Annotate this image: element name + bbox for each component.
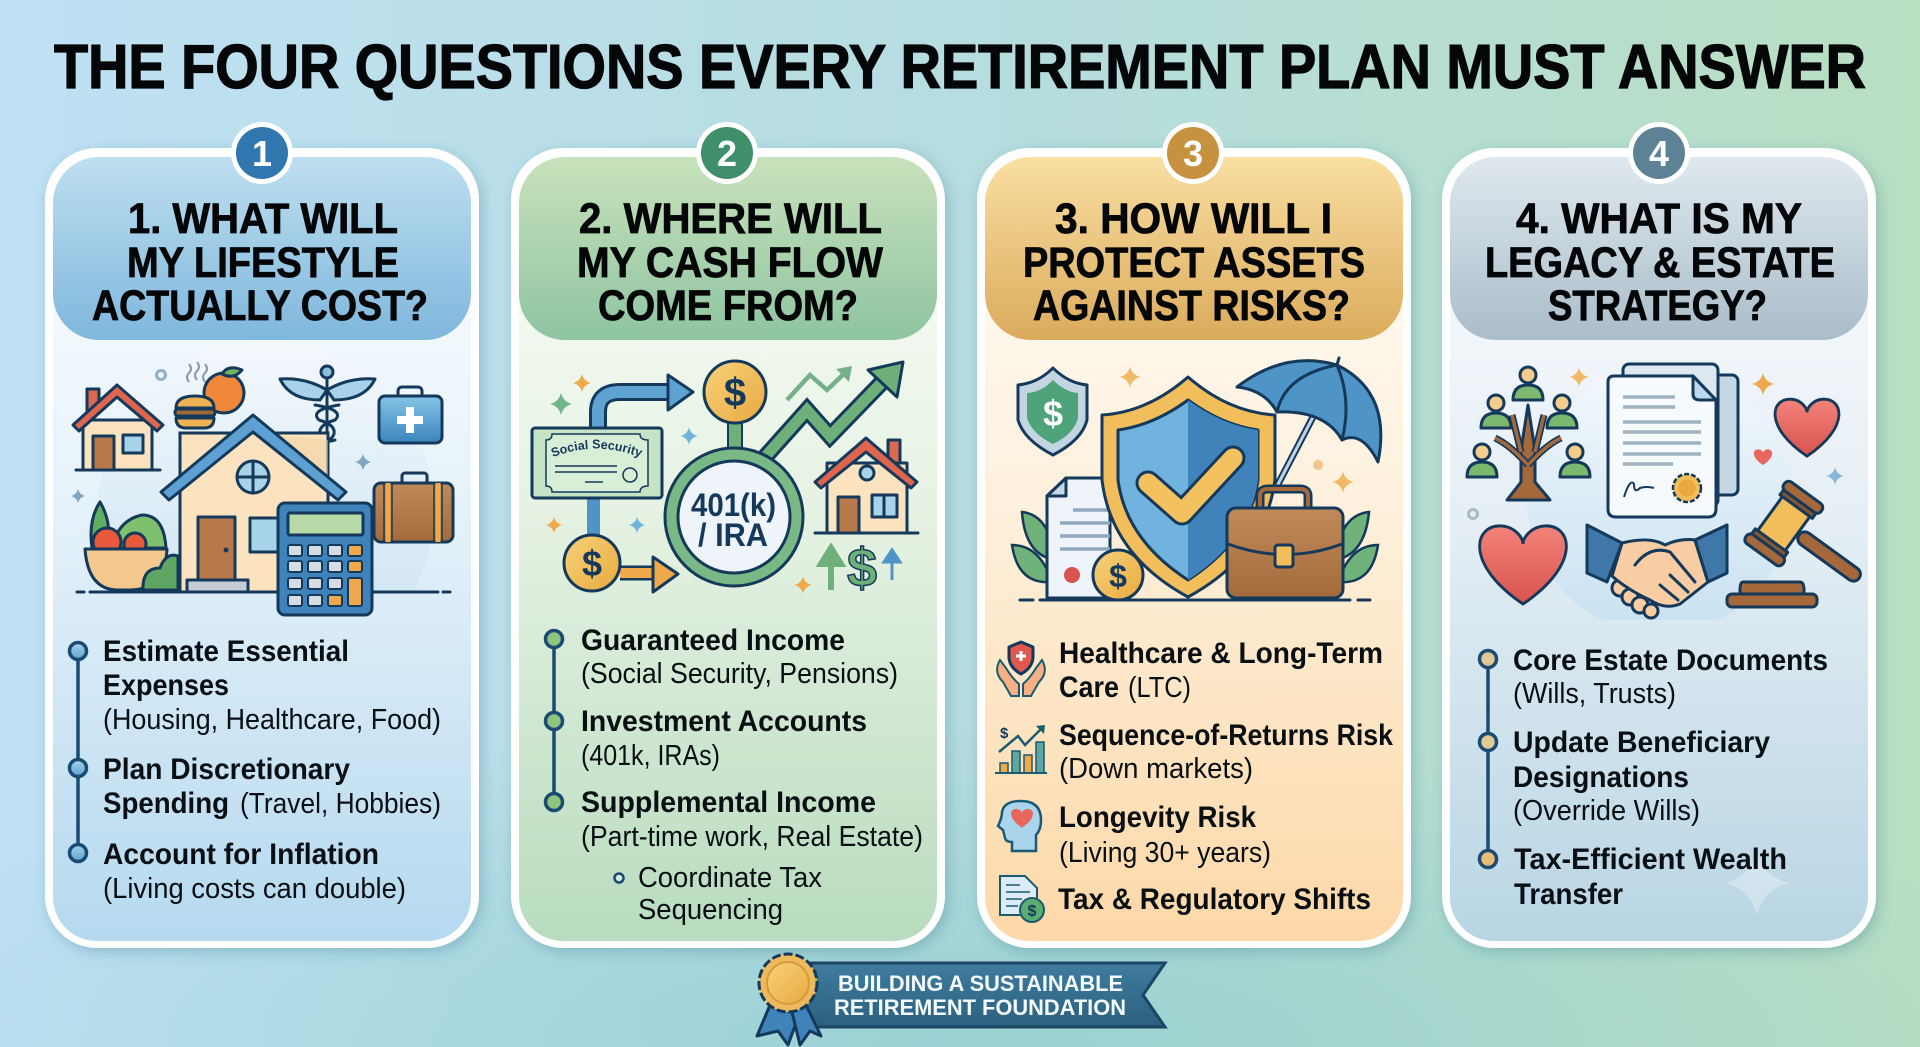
icon: burger and orange bbox=[156, 362, 244, 428]
heading: 2. WHERE WILL bbox=[579, 195, 882, 243]
list text: Transfer bbox=[1514, 878, 1623, 911]
icon: upper coin: $ bbox=[724, 371, 746, 415]
list text: Care bbox=[1059, 671, 1119, 704]
heading: PROTECT ASSETS bbox=[1023, 239, 1365, 287]
card frame bbox=[1442, 148, 1876, 948]
number badge 1 bbox=[231, 122, 293, 184]
card header bbox=[519, 157, 937, 340]
icon: lower coin with arrow: $ bbox=[582, 543, 602, 584]
icon: small green shield: $ bbox=[1043, 393, 1063, 434]
card frame bbox=[45, 148, 479, 948]
icon: head with heart bbox=[998, 801, 1041, 851]
card body bbox=[519, 157, 937, 941]
list text: (Living costs can double) bbox=[103, 873, 406, 905]
heading: COME FROM? bbox=[598, 282, 858, 330]
icon: large shield with check bbox=[1102, 377, 1275, 597]
icon: salad bowl bbox=[85, 502, 178, 590]
banner text: RETIREMENT FOUNDATION bbox=[834, 995, 1126, 1020]
icon: tax document: $ bbox=[1028, 903, 1037, 920]
icon: lower coin with arrow bbox=[564, 535, 678, 592]
icon: green dollar and arrows bbox=[821, 538, 900, 598]
list text: Coordinate Tax bbox=[638, 862, 822, 894]
list text: (401k, IRAs) bbox=[581, 740, 720, 772]
list text: Expenses bbox=[103, 669, 229, 702]
heading bbox=[1485, 195, 1835, 330]
number badge 4 bbox=[1628, 122, 1690, 184]
icon list bbox=[995, 642, 1047, 922]
icon: market chart: $ bbox=[1000, 725, 1009, 742]
icon: social security check bbox=[530, 426, 664, 500]
list text bbox=[581, 624, 923, 926]
icon: gavel bbox=[1727, 479, 1881, 609]
list text: Supplemental Income bbox=[581, 786, 876, 819]
icon: main house bbox=[161, 415, 346, 592]
icon: handshake bbox=[1587, 525, 1727, 618]
list text: Account for Inflation bbox=[103, 838, 379, 871]
list text: (LTC) bbox=[1128, 672, 1191, 704]
number badge 3: 3 bbox=[1183, 133, 1203, 174]
panel: 1 lifestyle cost bbox=[45, 122, 479, 948]
heading bbox=[92, 195, 428, 330]
banner: building a sustainable retirement foundation bbox=[757, 954, 1165, 1045]
icon: small green shield bbox=[1018, 368, 1087, 455]
card body bbox=[985, 157, 1403, 941]
heading: 1. WHAT WILL bbox=[128, 195, 398, 243]
arrow: blue to coin bbox=[598, 375, 693, 430]
list text: Guaranteed Income bbox=[581, 624, 845, 657]
list text: (Wills, Trusts) bbox=[1513, 678, 1676, 710]
list text: Plan Discretionary bbox=[103, 753, 350, 786]
heading: 4. WHAT IS MY bbox=[1516, 195, 1802, 243]
icon: small house bbox=[73, 385, 163, 470]
heading: AGAINST RISKS? bbox=[1033, 282, 1350, 330]
heading: LEGACY & ESTATE bbox=[1485, 239, 1835, 287]
card frame bbox=[511, 148, 945, 948]
ground line bbox=[1020, 598, 1370, 602]
banner text: BUILDING A SUSTAINABLE bbox=[838, 971, 1123, 996]
number badge 2: 2 bbox=[717, 133, 737, 174]
icon: family tree bbox=[1467, 367, 1590, 500]
icon: green dollar and arrows: $ bbox=[847, 538, 877, 598]
number badge 4: 4 bbox=[1649, 133, 1669, 174]
illustration: protection bbox=[1012, 358, 1381, 600]
ribbon bbox=[800, 963, 1165, 1027]
icon: social security check: Social Security bbox=[551, 440, 642, 458]
banner text bbox=[834, 971, 1126, 1020]
list text: Investment Accounts bbox=[581, 705, 867, 738]
card header bbox=[985, 157, 1403, 340]
illustration: lifestyle costs bbox=[71, 362, 454, 616]
icon: caduceus bbox=[280, 366, 375, 451]
icon: hands with shield bbox=[997, 642, 1045, 696]
list text: (Housing, Healthcare, Food) bbox=[103, 704, 441, 736]
number badge 2 bbox=[696, 122, 758, 184]
icon: 401k ring: 401(k) bbox=[691, 487, 776, 523]
decorative sparkle watermark bbox=[1725, 851, 1789, 915]
card frame bbox=[977, 148, 1411, 948]
list text: (Part-time work, Real Estate) bbox=[581, 821, 923, 853]
icon: briefcase bbox=[1227, 489, 1343, 598]
icon: rental house bbox=[815, 438, 918, 533]
medal bbox=[757, 954, 821, 1045]
heading bbox=[1023, 195, 1365, 330]
panel: 3 protect assets bbox=[977, 122, 1411, 948]
arrow: growth zigzag bbox=[765, 362, 903, 457]
card body bbox=[53, 157, 471, 941]
heading: STRATEGY? bbox=[1548, 282, 1767, 330]
list text: (Living 30+ years) bbox=[1059, 837, 1271, 869]
card header bbox=[53, 157, 471, 340]
panel: 4 legacy and estate bbox=[1442, 122, 1881, 948]
list text: (Override Wills) bbox=[1513, 795, 1700, 827]
list text: (Social Security, Pensions) bbox=[581, 658, 898, 690]
illustration: legacy bbox=[1467, 364, 1881, 633]
list text: Designations bbox=[1513, 761, 1689, 794]
icon: upper coin bbox=[704, 361, 766, 453]
list text: Healthcare & Long-Term bbox=[1059, 637, 1383, 670]
icon: tax document bbox=[1000, 876, 1044, 922]
list text: (Travel, Hobbies) bbox=[240, 788, 441, 820]
list text: Spending bbox=[103, 787, 229, 820]
timeline bullets bbox=[1480, 650, 1496, 868]
heading bbox=[577, 195, 883, 330]
list text: Estimate Essential bbox=[103, 635, 349, 668]
number badge 1: 1 bbox=[252, 133, 272, 174]
card header bbox=[1450, 157, 1868, 340]
list text: Tax-Efficient Wealth bbox=[1514, 843, 1787, 876]
list text: Update Beneficiary bbox=[1513, 726, 1770, 759]
list text: Tax & Regulatory Shifts bbox=[1058, 883, 1371, 916]
heading: 3. HOW WILL I bbox=[1055, 195, 1332, 243]
connector to lower coin bbox=[587, 496, 600, 538]
icon: market chart bbox=[995, 725, 1047, 773]
list text: Longevity Risk bbox=[1059, 801, 1256, 834]
icon: hearts bbox=[1480, 399, 1839, 604]
number badge 3 bbox=[1162, 122, 1224, 184]
list text bbox=[103, 635, 441, 905]
timeline bullets bbox=[70, 642, 86, 862]
list text: Sequencing bbox=[638, 894, 783, 926]
heading: MY LIFESTYLE bbox=[127, 239, 399, 287]
card body bbox=[1450, 157, 1868, 941]
list text bbox=[1513, 644, 1828, 911]
heading: MY CASH FLOW bbox=[577, 239, 883, 287]
icon: leaves bbox=[1012, 512, 1378, 582]
icon: document with coin: $ bbox=[1109, 558, 1127, 594]
icon: medical kit bbox=[379, 387, 442, 443]
icon: suitcase bbox=[374, 473, 453, 542]
illustration: income sources bbox=[530, 360, 920, 598]
list text: (Down markets) bbox=[1059, 753, 1253, 785]
icon: 401k ring bbox=[665, 448, 803, 586]
icon: umbrella bbox=[1237, 358, 1381, 490]
panel: 2 cash flow bbox=[507, 122, 955, 958]
ground line bbox=[77, 590, 450, 594]
timeline bullets bbox=[546, 630, 624, 882]
icon: 401k ring: / IRA bbox=[698, 517, 768, 553]
icon: legal documents bbox=[1608, 364, 1738, 517]
list text bbox=[1058, 637, 1393, 916]
icon: calculator bbox=[278, 503, 372, 615]
list text: Sequence-of-Returns Risk bbox=[1059, 719, 1393, 752]
heading: ACTUALLY COST? bbox=[92, 282, 428, 330]
icon: document with coin bbox=[1047, 478, 1143, 600]
list text: Core Estate Documents bbox=[1513, 644, 1828, 677]
